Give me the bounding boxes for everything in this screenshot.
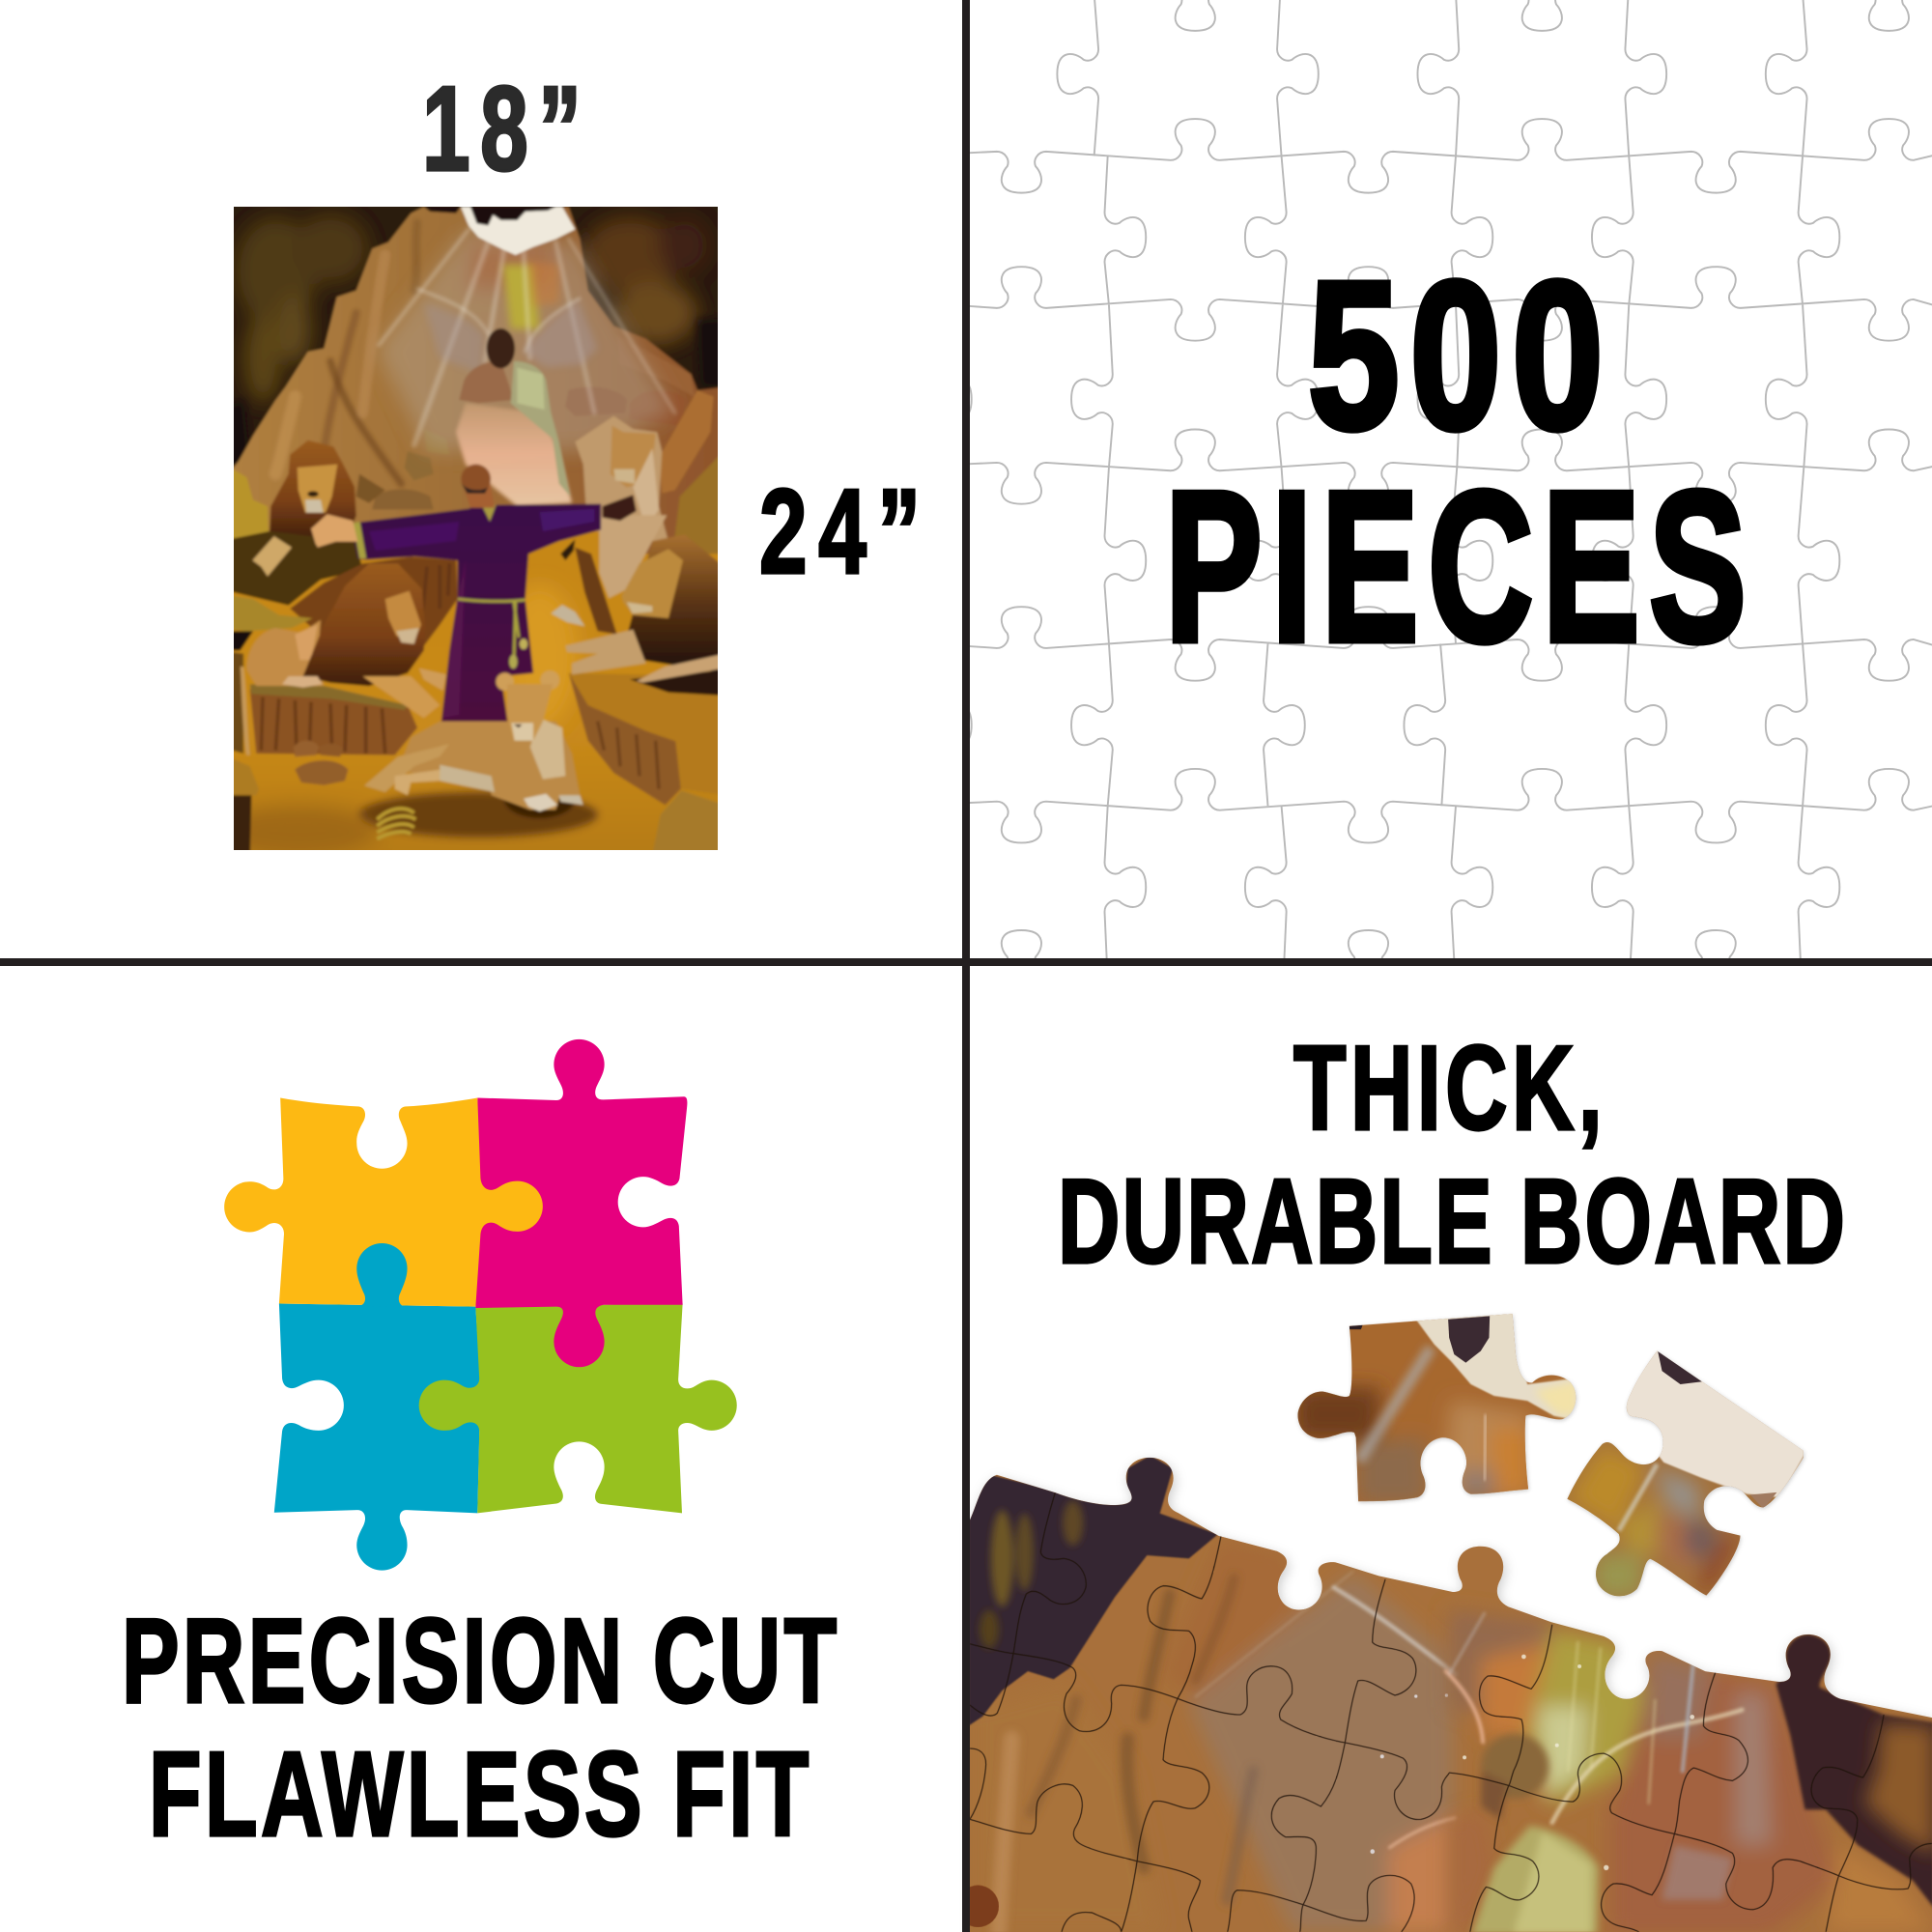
icon: four coloured jigsaw pieces	[224, 1039, 737, 1571]
divider: vertical	[962, 0, 970, 1932]
panel: 500 pieces	[930, 0, 1932, 972]
heading: DURABLE BOARD: DURABLE BOARD	[1058, 1154, 1845, 1288]
lion top left	[270, 440, 356, 542]
boulders beside angel	[355, 356, 694, 510]
panel: precision cut	[122, 1039, 837, 1861]
yellow piece	[224, 1097, 543, 1307]
blue knob	[356, 1243, 408, 1307]
right lioness legs	[599, 515, 667, 598]
magenta piece	[475, 1039, 687, 1367]
image: Daniel in the lions den painting	[217, 194, 730, 864]
heading: width 18 inches: 18”	[422, 62, 582, 195]
blue piece	[274, 1303, 480, 1571]
light cone and rays	[377, 229, 675, 451]
puzzle piece: loose top	[1294, 1311, 1584, 1504]
heading: THICK,: THICK,	[1293, 1021, 1603, 1154]
panel: thick durable board	[957, 1021, 1932, 1932]
divider: horizontal	[0, 958, 1932, 966]
lion right	[565, 534, 724, 683]
heading: FLAWLESS FIT: FLAWLESS FIT	[149, 1727, 809, 1861]
rays	[1195, 1572, 1456, 1697]
hand and head of Daniel	[311, 465, 637, 545]
rope belt	[458, 599, 526, 660]
lioness upper right	[575, 416, 668, 542]
lower scene	[217, 465, 724, 863]
panel: puzzle size	[217, 62, 921, 864]
rib bones	[377, 809, 415, 838]
left side paint, in left crop coordinates	[970, 1539, 1453, 1932]
heading: PRECISION CUT: PRECISION CUT	[122, 1594, 837, 1727]
angel on board	[1471, 1734, 1732, 1932]
puzzle piece: loose right	[1561, 1345, 1813, 1604]
puzzle cut lines	[930, 0, 1932, 972]
angel figure	[456, 328, 572, 506]
puzzle seams	[970, 1492, 1932, 1932]
image: assembled puzzle board	[957, 1446, 1932, 1932]
hand and paw top left	[252, 519, 353, 577]
mountain	[227, 207, 724, 561]
right ledge	[569, 548, 724, 805]
lion lower left	[241, 563, 446, 755]
heading: PIECES: PIECES	[1165, 447, 1747, 687]
heading: 500: 500	[1308, 239, 1604, 473]
right side paint, in right crop coordinates	[1446, 1610, 1932, 1932]
cave floor	[221, 531, 724, 863]
rocks on the floor	[221, 605, 724, 863]
heading: height 24 inches: 24”	[759, 465, 921, 598]
lioness bottom	[364, 670, 583, 811]
clearing in the cave roof	[461, 207, 575, 255]
cave foliage	[234, 213, 710, 403]
dark cave wall	[963, 1456, 1218, 1729]
angel wings	[424, 303, 485, 374]
left ledge	[221, 531, 458, 755]
green piece	[419, 1303, 737, 1513]
rock wall pillars	[227, 390, 724, 561]
robe of Daniel	[352, 504, 601, 722]
